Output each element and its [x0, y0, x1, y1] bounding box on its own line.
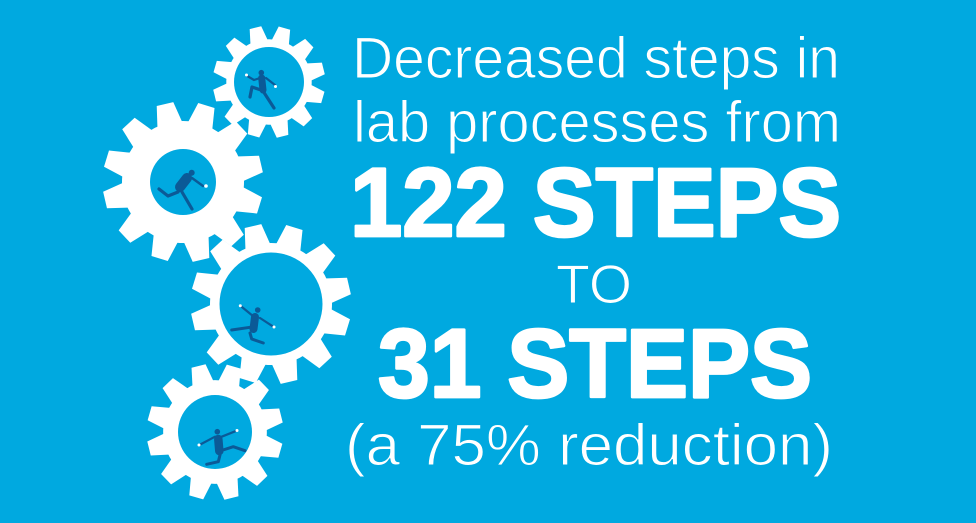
- gear 2: large left gear with running figure: [83, 82, 283, 282]
- heading line 1: Decreased steps in: [352, 26, 840, 91]
- icon: running figure 1: [245, 70, 277, 108]
- big number: 31 steps: 31 STEPS: [378, 309, 812, 418]
- gear 4: bottom gear with running figure: [131, 348, 299, 516]
- heading line 2: lab processes from: [353, 90, 841, 155]
- gear 1: top small gear with running figure: [200, 13, 338, 151]
- big number: 122 steps: 122 STEPS: [350, 148, 841, 257]
- connector word: to: TO: [556, 253, 632, 315]
- gear 3: large centre gear with running figure: [171, 204, 371, 404]
- reduction note: (a 75% reduction): [345, 413, 833, 478]
- icon: running figure 3: [232, 304, 276, 343]
- icon: running figure 2: [159, 170, 208, 209]
- icon: running figure 4: [198, 429, 245, 464]
